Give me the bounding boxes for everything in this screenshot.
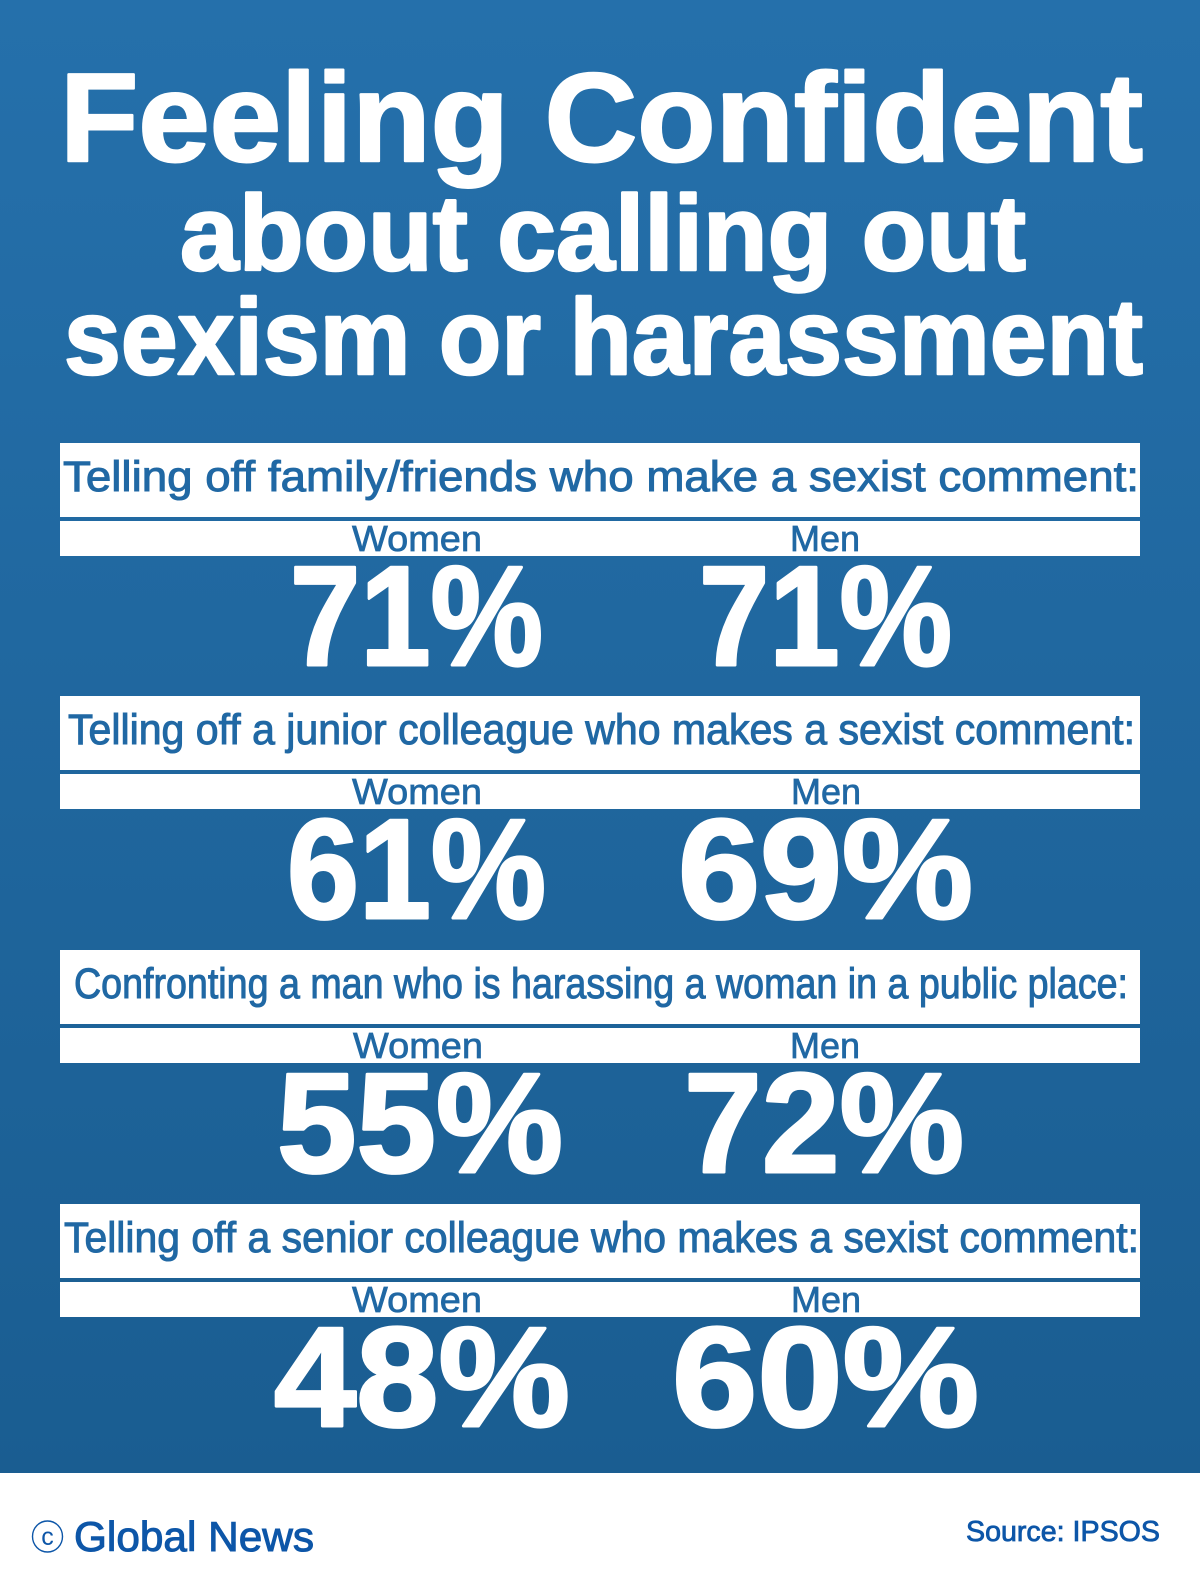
stat: men 72%: 72%: [684, 1044, 964, 1203]
question banner: [60, 443, 1140, 517]
label banner: [60, 1279, 1140, 1320]
panel: family and friends: [60, 443, 1140, 696]
question banner: Telling off a senior colleague who makes a sexist comment:: [64, 1214, 1139, 1262]
stat: men 71%: 71%: [699, 537, 952, 696]
stat: women 55%: 55%: [277, 1044, 563, 1203]
label banner: Men: [791, 771, 861, 812]
label banner: Men: [791, 1279, 861, 1320]
icon: copyright symbol: c: [41, 1523, 54, 1551]
credit: Global News: Global News: [74, 1513, 314, 1560]
question banner: [60, 950, 1140, 1024]
title: Feeling Confident: [60, 47, 1143, 188]
question banner: [60, 696, 1140, 770]
question banner: Telling off a junior colleague who makes a sexist comment:: [68, 706, 1135, 754]
panel: junior colleague: [60, 696, 1140, 949]
label banner: [60, 518, 1140, 559]
title: sexism or harassment: [64, 276, 1143, 397]
stat: men 60%: 60%: [672, 1298, 979, 1457]
panel: harassment in public: [60, 950, 1140, 1203]
label banner: Men: [790, 1025, 860, 1066]
stat: men 69%: 69%: [678, 790, 973, 949]
label banner: [60, 771, 1140, 812]
question banner: [60, 1204, 1140, 1278]
source: Source: IPSOS: [966, 1516, 1160, 1548]
title: [60, 47, 1143, 397]
footer: [0, 1473, 1200, 1584]
stat: women 61%: 61%: [287, 790, 546, 949]
label banner: [60, 1025, 1140, 1066]
stat: women 48%: 48%: [274, 1298, 570, 1457]
title: about calling out: [180, 173, 1026, 293]
label banner: Women: [352, 518, 482, 559]
label banner: Women: [352, 1279, 482, 1320]
panel: senior colleague: [60, 1204, 1140, 1457]
icon: copyright symbol: [32, 1521, 62, 1552]
label banner: Women: [352, 771, 482, 812]
question banner: Telling off family/friends who make a sexist comment:: [63, 453, 1139, 501]
label banner: Men: [790, 518, 860, 559]
label banner: Women: [353, 1025, 483, 1066]
stat: women 71%: 71%: [290, 537, 543, 696]
